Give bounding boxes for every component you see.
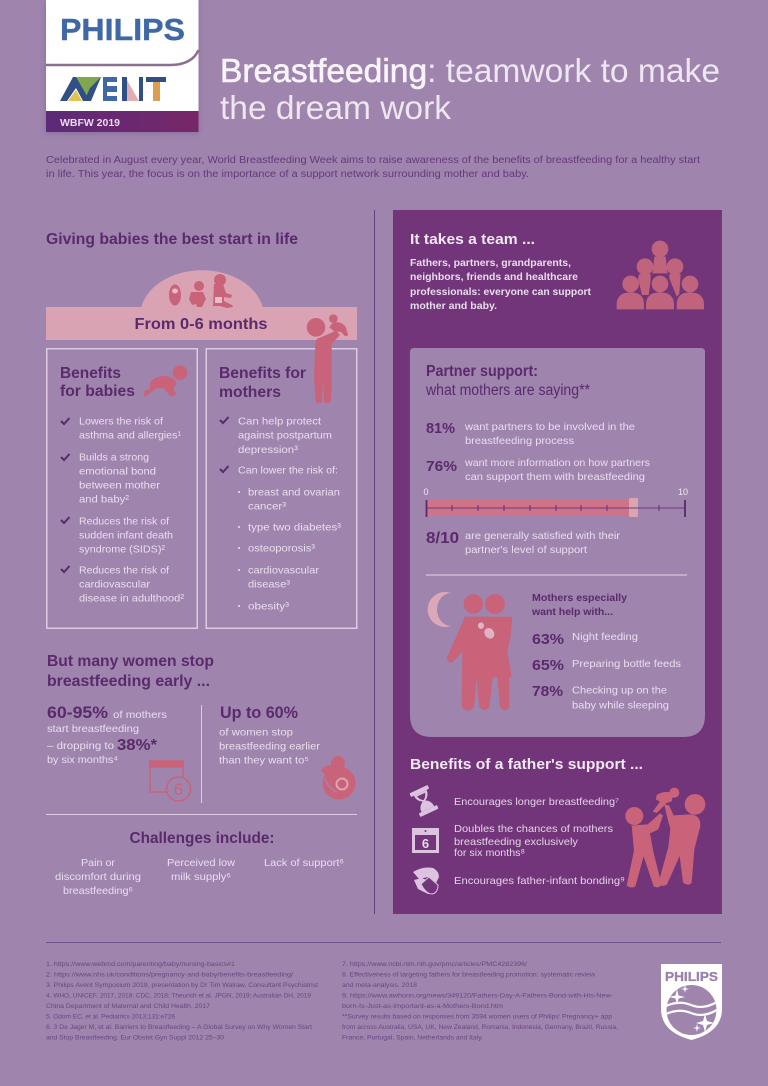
heading: partner support: Partner support:: [426, 363, 538, 380]
icon: mother breastfeeding: [321, 756, 356, 800]
stat: 78% checking on baby: 78%: [532, 683, 563, 700]
footnotes left: China Department of Maternal and Child Health, 2017: [46, 1003, 210, 1010]
text: team description: Fathers, partners, grandparents,: [410, 257, 571, 269]
text: team description: neighbors, friends and healthcare: [410, 271, 578, 283]
footnotes left: 3. Philips Avent Symposium 2019, presentation by Dr Tim Walraw, Consultant Psychiatrist: [46, 982, 318, 989]
panel: partner support: [410, 348, 705, 737]
footnotes left: 5. Odom EC, et al. Pediatrics 2013;131:e726: [46, 1014, 175, 1020]
stat: 81%: want partners to be involved in the: [464, 421, 635, 433]
column divider: [374, 210, 376, 914]
challenge: low milk supply: Perceived low: [167, 857, 235, 869]
challenge: pain: [55, 857, 141, 897]
stat: 63% night feeding: Night feeding: [572, 631, 638, 643]
divider: [46, 814, 357, 816]
footer divider: [46, 942, 721, 944]
heading: but many women stop: But many women stop: [47, 653, 214, 670]
benefits list: mothers: depression³: [238, 444, 299, 456]
footnotes right: from across Australia, USA, UK, New Zealand, Romania, Indonesia, Germany, Brazil, Russia,: [342, 1024, 618, 1031]
stat: 8/10: [426, 530, 621, 556]
divider between stats: [200, 705, 202, 803]
benefits list: mothers: obesity³: [248, 600, 290, 612]
text: doubles the chances: Doubles the chances of mothers: [454, 823, 613, 835]
heading: benefits for babies: Benefits: [60, 365, 121, 382]
stat: 76%: 76%: [426, 458, 457, 475]
challenge: lack of support: Lack of support⁶: [264, 857, 344, 869]
benefits list: mothers: cardiovascular: [248, 564, 320, 576]
benefits list: babies: [61, 416, 185, 604]
stat: 60-95% start, 38% at six months: by six months⁴: [47, 754, 118, 766]
heading: mothers especially want help: Mothers especially: [532, 593, 627, 604]
text: team description: mother and baby.: [410, 300, 497, 312]
challenge: pain: discomfort during: [55, 871, 141, 883]
benefits list: babies: Reduces the risk of: [79, 516, 169, 528]
stat: 81%: breastfeeding process: [465, 435, 574, 447]
title: [220, 52, 720, 126]
benefits list: babies: emotional bond: [79, 466, 156, 478]
logo block: Philips Avent WBFW 2019: PHILIPS: [60, 12, 185, 47]
footnotes right: 9. https://www.awhonn.org/news/349120/Fathers-Day-A-Fathers-Bond-with-His-New-: [342, 992, 613, 1000]
icons: three baby stages: [169, 274, 233, 308]
stat: up to 60%: Up to 60%: [220, 704, 298, 722]
stat: 60-95% start, 38% at six months: 38%*: [117, 737, 158, 754]
stat: 8/10: are generally satisfied with their: [465, 530, 621, 542]
stat: up to 60%: [219, 704, 321, 766]
stat: 60-95% start, 38% at six months: – dropping to: [47, 740, 114, 752]
challenge: pain: breastfeeding⁶: [63, 885, 133, 897]
logo: Philips shield: [661, 964, 722, 1040]
benefits list: babies: syndrome (SIDS)²: [79, 544, 166, 556]
stat: 78% checking on baby: Checking up on the: [572, 684, 667, 696]
stat: 81%: 81%: [426, 420, 455, 437]
stat: 76%: [426, 457, 650, 483]
icon: mother lifting baby: [307, 314, 348, 403]
heading: giving babies the best start: Giving babies the best start in life: [46, 231, 298, 248]
benefits list: mothers: type two diabetes³: [248, 522, 342, 534]
title: Breastfeeding: teamwork to make: [220, 52, 720, 89]
footnotes left: and Stop Breastfeeding. Eur Obstet Gyn Suppl 2012 25–30: [46, 1034, 224, 1042]
benefits list: mothers: against postpartum: [238, 430, 332, 442]
arch and band: from 0-6 months: [46, 270, 357, 340]
stat: 65% bottle feeds: [532, 657, 681, 674]
stat: 60-95% start, 38% at six months: 60-95%: [47, 704, 108, 722]
stat: 76%: want more information on how partners: [464, 457, 650, 469]
stat: 60-95% start, 38% at six months: start breastfeeding: [47, 723, 139, 735]
heading: benefits for mothers: [219, 365, 306, 401]
icon: hands: [413, 868, 439, 894]
panel: right dark team panel: [393, 210, 722, 914]
icon: moon: [428, 592, 451, 627]
icon: calendar six months: 6: [174, 780, 183, 799]
stat: up to 60%: breastfeeding earlier: [219, 740, 321, 752]
scale chart: 8 out of 10: 0: [423, 487, 429, 497]
icon: couple with baby: [447, 594, 512, 710]
stat: up to 60%: than they want to⁵: [219, 754, 309, 766]
heading: challenges include: Challenges include:: [130, 830, 274, 847]
footnotes right: born-Is-Just-as-Important-as-a-Mothers-Bond.htm: [342, 1003, 503, 1010]
stat: 65% bottle feeds: Preparing bottle feeds: [572, 658, 681, 670]
benefits list: mothers: disease³: [248, 578, 291, 590]
heading: benefits for babies: [60, 365, 135, 400]
logo block: Philips Avent WBFW 2019: WBFW 2019: [60, 117, 120, 129]
benefits list: babies: Reduces the risk of: [79, 564, 169, 576]
stat: 8/10: 8/10: [426, 530, 459, 547]
heading: mothers especially want help: [531, 593, 627, 618]
icon: calendar six: [412, 828, 439, 853]
text: doubles the chances: for six months⁸: [454, 847, 525, 859]
text: father-infant bonding: Encourages father-infant bonding⁹: [454, 875, 625, 887]
intro text: in life. This year, the focus is on the importance of a support network surrounding mother and baby.: [46, 168, 529, 180]
footnotes left: 2. https://www.nhs.uk/conditions/pregnancy-and-baby/benefits-breastfeeding/: [46, 972, 293, 978]
logo: Philips shield: PHILIPS: [665, 970, 718, 984]
intro text: [46, 154, 700, 180]
icon: parents lifting baby: [625, 788, 705, 888]
heading: but many women stop: [47, 653, 214, 690]
benefits list: mothers: cancer³: [248, 500, 287, 512]
stat: up to 60%: of women stop: [219, 726, 293, 738]
icon: group of people: [617, 241, 704, 309]
benefits list: mothers: Can lower the risk of:: [238, 464, 338, 476]
text: longer breastfeeding: Encourages longer breastfeeding⁷: [454, 796, 619, 808]
stat: 81%: [426, 420, 635, 447]
stat: 60-95% start, 38% at six months: of mothers: [113, 709, 167, 721]
stat: 60-95% start, 38% at six months: [47, 704, 167, 766]
text: doubles the chances: breastfeeding exclusively: [454, 836, 579, 848]
benefits list: babies: and baby²: [79, 494, 130, 506]
footnotes left: 6. 3 De Jager M, et al. Barriers to Breastfeeding – A Global Survey on Why Women Start: [46, 1024, 312, 1031]
footnotes right: 7. https://www.ncbi.nlm.nih.gov/pmc/articles/PMC4282396/: [342, 961, 527, 968]
heading: partner support: [425, 363, 590, 399]
benefits list: babies: disease in adulthood²: [79, 592, 185, 604]
heading: partner support: what mothers are saying**: [425, 382, 590, 399]
footnotes left: [46, 961, 318, 1042]
intro text: Celebrated in August every year, World Breastfeeding Week aims to raise awareness of the benefits of breastfeeding for a healthy start: [46, 154, 700, 166]
text: team description: professionals: everyone can support: [410, 286, 591, 298]
footnotes right: and meta-analysis. 2018: [342, 982, 417, 989]
stat: 76%: can support them with breastfeeding: [465, 471, 645, 483]
panel: benefits for mothers: [206, 349, 357, 628]
text: team description: [410, 257, 591, 312]
text: doubles the chances: [454, 823, 613, 859]
stat: 63% night feeding: 63%: [532, 631, 564, 648]
stat: 8/10: partner's level of support: [465, 544, 587, 556]
benefits list: babies: Builds a strong: [79, 452, 149, 464]
challenge: pain: Pain or: [81, 857, 116, 869]
icon: calendar six months: [150, 761, 190, 801]
heading: benefits for babies: for babies: [60, 383, 135, 400]
heading: it takes a team: It takes a team ...: [410, 231, 535, 248]
icon: crawling baby: [144, 365, 187, 397]
icon: calendar six: 6: [422, 836, 429, 851]
scale chart: 8 out of 10: [423, 487, 688, 517]
benefits list: mothers: breast and ovarian: [248, 486, 340, 498]
benefits list: mothers: [220, 416, 342, 612]
benefits list: mothers: osteoporosis³: [248, 542, 316, 554]
stat: 63% night feeding: [532, 631, 638, 648]
icon: hourglass: [409, 785, 439, 817]
benefits list: babies: asthma and allergies¹: [79, 430, 182, 442]
benefits list: babies: between mother: [79, 480, 161, 492]
stat: 65% bottle feeds: 65%: [532, 657, 564, 674]
footnotes right: France, Portugal, Spain, Netherlands and Italy.: [342, 1034, 483, 1042]
stat: 78% checking on baby: [532, 683, 669, 712]
benefits list: mothers: Can help protect: [238, 416, 321, 428]
footnotes right: [342, 961, 618, 1042]
benefits list: babies: sudden infant death: [79, 530, 173, 542]
benefits list: babies: Lowers the risk of: [79, 416, 163, 428]
footnotes right: **Survey results based on responses from 3594 women users of Philips' Pregnancy+ app: [342, 1014, 612, 1020]
arch and band: from 0-6 months: From 0-6 months: [134, 316, 268, 333]
heading: benefits of a father's support: Benefits of a father's support ...: [410, 756, 643, 773]
footnotes left: 4. WHO, UNICEF, 2017, 2018; CDC, 2018; Theurich et al. JPGN, 2019; Australian DH, 2019: [46, 992, 311, 1000]
footnotes left: 1. https://www.webmd.com/parenting/baby/nursing-basics#1: [46, 961, 235, 968]
heading: benefits for mothers: mothers: [219, 384, 281, 401]
challenge: low milk supply: [167, 857, 235, 883]
footnotes right: 8. Effectiveness of targeting fathers for breastfeeding promotion: systematic review: [342, 972, 595, 978]
title: the dream work: [220, 89, 451, 126]
logo block: Philips Avent WBFW 2019: [46, 0, 198, 132]
scale chart: 8 out of 10: 10: [678, 487, 688, 497]
heading: but many women stop: breastfeeding early ...: [47, 673, 210, 690]
benefits list: babies: cardiovascular: [79, 578, 151, 590]
panel: benefits for babies: [47, 349, 197, 628]
challenge: low milk supply: milk supply⁶: [171, 871, 231, 883]
stat: 78% checking on baby: baby while sleeping: [572, 700, 669, 712]
heading: mothers especially want help: want help with...: [531, 607, 613, 618]
heading: benefits for mothers: Benefits for: [219, 365, 306, 382]
